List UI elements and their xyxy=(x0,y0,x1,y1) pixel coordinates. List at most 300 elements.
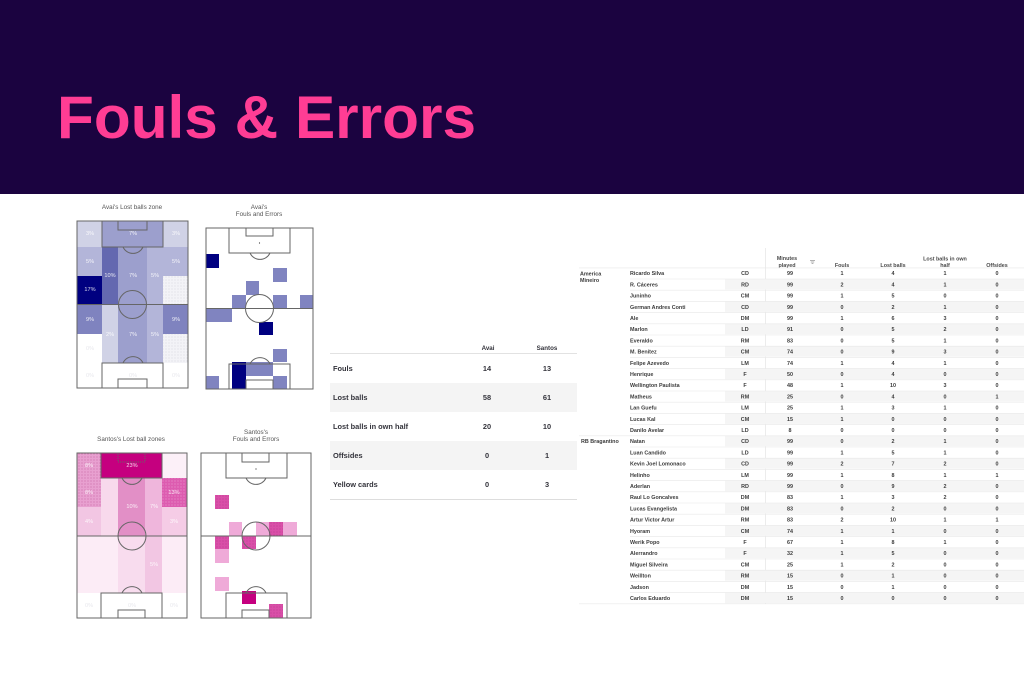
row: offsides: Offsides xyxy=(333,451,363,460)
panel: Avai lost balls zone heatmap: 9% xyxy=(172,317,180,323)
row: Weillton: RM xyxy=(741,574,750,580)
row: Wellington Paulista: 1 xyxy=(840,383,844,389)
row: lost balls: Lost balls xyxy=(333,393,368,402)
row: German Andres Conti: German Andres Conti xyxy=(630,305,686,311)
row: Natan: 2 xyxy=(892,439,894,445)
row: Aderlan: 99 xyxy=(787,484,793,490)
row: Wellington Paulista: 0 xyxy=(996,383,998,389)
row: Hyoram xyxy=(630,529,998,535)
row: yellow cards: 0 xyxy=(485,480,489,489)
row: Marlon: Marlon xyxy=(630,327,648,333)
table column headers: Minutes xyxy=(777,256,797,262)
panel: Santos lost ball zones heatmap: 0% xyxy=(170,603,178,609)
row: offsides xyxy=(333,451,549,460)
row: Ricardo Silva: CD xyxy=(741,271,749,277)
row: Jadson: 15 xyxy=(787,585,793,591)
row: Jadson xyxy=(630,585,998,591)
row: Aderlan: Aderlan xyxy=(630,484,650,490)
row: Lucas Kal: 0 xyxy=(944,417,946,423)
row: Luan Candido xyxy=(630,450,998,456)
panel: Santos lost ball zones heatmap xyxy=(77,436,187,618)
row: Lucas Kal: Lucas Kal xyxy=(630,417,656,423)
table column headers: Offsides xyxy=(986,263,1008,269)
row: Juninho: 5 xyxy=(892,294,894,300)
panel: Santos lost ball zones heatmap: 8% xyxy=(85,490,93,496)
row: Carlos Eduardo xyxy=(630,596,998,602)
row: Kevin Joel Lomonaco: CD xyxy=(741,462,749,468)
row: Henrique: 0 xyxy=(944,372,946,378)
row: Raul Lo Goncalves: DM xyxy=(741,495,750,501)
team label: America Mineiro: America xyxy=(580,272,602,278)
row: Lucas Kal: 15 xyxy=(787,417,793,423)
panel: Avai lost balls zone heatmap: 17% xyxy=(84,287,96,293)
row: Lucas Evangelista: 0 xyxy=(840,506,844,512)
row: Miguel Silveira: CM xyxy=(741,562,750,568)
panel: Avai lost balls zone heatmap: 3% xyxy=(86,231,94,237)
row: Juninho: 0 xyxy=(944,294,946,300)
panel: Avai lost balls zone heatmap: 0% xyxy=(86,373,94,379)
row: Raul Lo Goncalves: 83 xyxy=(787,495,793,501)
row: Werik Popo: 1 xyxy=(944,540,946,546)
row: Wellington Paulista: F xyxy=(743,383,747,389)
row: Carlos Eduardo: 0 xyxy=(944,596,946,602)
row: Marlon: 0 xyxy=(996,327,998,333)
row: Luan Candido: 1 xyxy=(840,450,844,456)
row: Wellington Paulista xyxy=(630,383,998,389)
panel: Avai lost balls zone heatmap: 9% xyxy=(86,317,94,323)
row: Luan Candido: LD xyxy=(741,450,749,456)
panel: Avai lost balls zone heatmap: 5% xyxy=(151,273,159,279)
row: Lucas Kal: 0 xyxy=(996,417,998,423)
row: Jadson: 0 xyxy=(996,585,998,591)
row: Everaldo: 5 xyxy=(892,338,894,344)
row: Hyoram: 1 xyxy=(892,529,894,535)
row: Lan Guefu xyxy=(630,406,998,412)
row: Artur Victor Artur: 2 xyxy=(840,518,844,524)
row: Raul Lo Goncalves: 3 xyxy=(892,495,894,501)
row: Lan Guefu: 25 xyxy=(787,406,793,412)
heading: Avai lost balls zone: Avai's Lost balls zone xyxy=(102,204,163,211)
row: lost balls in own half: 20 xyxy=(483,422,491,431)
row: Felipe Azevedo: LM xyxy=(741,361,749,367)
row: Felipe Azevedo: 4 xyxy=(892,361,894,367)
row: Marlon: 5 xyxy=(892,327,894,333)
row: Juninho: Juninho xyxy=(630,294,652,300)
row: Kevin Joel Lomonaco: Kevin Joel Lomonaco xyxy=(630,462,686,468)
row: lost balls in own half: Lost balls in own half xyxy=(333,422,409,431)
row: Artur Victor Artur: 1 xyxy=(944,518,946,524)
row: Helinho: 1 xyxy=(996,473,998,479)
row: Hyoram: CM xyxy=(741,529,750,535)
table column headers: Fouls xyxy=(835,263,849,269)
row: Matheus: 0 xyxy=(840,394,844,400)
row: Aderlan: RD xyxy=(741,484,749,490)
row: Helinho xyxy=(630,473,998,479)
row: Artur Victor Artur: Artur Victor Artur xyxy=(630,518,675,524)
row: Werik Popo xyxy=(630,540,998,546)
title: Fouls & Errors xyxy=(57,84,476,151)
row: Lucas Evangelista: 83 xyxy=(787,506,793,512)
row: Carlos Eduardo: 0 xyxy=(996,596,998,602)
row: R. Caceres: 0 xyxy=(996,282,998,288)
row: Artur Victor Artur: 10 xyxy=(890,518,896,524)
row: Lucas Kal xyxy=(630,417,998,423)
row: Ale xyxy=(630,316,998,322)
row: German Andres Conti: 1 xyxy=(944,305,946,311)
row: Helinho: Helinho xyxy=(630,473,650,479)
panel: Santos lost ball zones heatmap: 3% xyxy=(170,519,178,525)
row: Ale: 1 xyxy=(840,316,844,322)
row: yellow cards: 3 xyxy=(545,480,549,489)
row: Aderlan: 0 xyxy=(996,484,998,490)
row: Natan: 0 xyxy=(996,439,998,445)
row: Raul Lo Goncalves: 1 xyxy=(840,495,844,501)
row: Hyoram: Hyoram xyxy=(630,529,650,535)
heading: Santos fouls and errors: Santos's xyxy=(244,429,268,436)
row: Matheus: Matheus xyxy=(630,394,652,400)
row: Marlon: 2 xyxy=(944,327,946,333)
heading: Avai fouls and errors: Fouls and Errors xyxy=(236,211,282,218)
row: Ale: 3 xyxy=(944,316,946,322)
row: Henrique xyxy=(630,372,998,378)
row: Carlos Eduardo: 0 xyxy=(892,596,894,602)
row: offsides: 1 xyxy=(545,451,549,460)
panel: team comparison table xyxy=(330,345,577,500)
row: Miguel Silveira: 25 xyxy=(787,562,793,568)
row: Everaldo: 0 xyxy=(996,338,998,344)
row: Artur Victor Artur: RM xyxy=(741,518,750,524)
row: lost balls in own half xyxy=(333,422,551,431)
row: M. Benitez: M. Benítez xyxy=(630,350,657,356)
row: Alerrandro: 5 xyxy=(892,551,894,557)
row: Weillton xyxy=(630,574,998,580)
team label: America Mineiro: Mineiro xyxy=(580,278,600,284)
panel: Avai lost balls zone heatmap: 3% xyxy=(172,231,180,237)
row: Lan Guefu: 1 xyxy=(840,406,844,412)
row: Helinho: 1 xyxy=(840,473,844,479)
row: Marlon: 91 xyxy=(787,327,793,333)
row: lost balls: 58 xyxy=(483,393,491,402)
row: Aderlan: 9 xyxy=(892,484,894,490)
table header xyxy=(482,345,558,352)
row: Ricardo Silva: 4 xyxy=(892,271,894,277)
row: Ricardo Silva: 99 xyxy=(787,271,793,277)
row: Lan Guefu: LM xyxy=(741,406,749,412)
row: Everaldo: RM xyxy=(741,338,750,344)
table column headers: half xyxy=(940,263,950,269)
row: Matheus: 25 xyxy=(787,394,793,400)
row: R. Caceres xyxy=(630,282,998,288)
panel: Santos lost ball zones heatmap: 0% xyxy=(85,603,93,609)
row: Natan: CD xyxy=(741,439,749,445)
row: M. Benitez: 0 xyxy=(996,350,998,356)
panel: Santos lost ball zones heatmap: 4% xyxy=(85,519,93,525)
row: Wellington Paulista: Wellington Paulista xyxy=(630,383,681,389)
row: Ricardo Silva: 1 xyxy=(840,271,844,277)
row: German Andres Conti: 0 xyxy=(996,305,998,311)
row: Lan Guefu: 0 xyxy=(996,406,998,412)
row: Henrique: 50 xyxy=(787,372,793,378)
row: Alerrandro xyxy=(630,551,998,557)
row: Danilo Avelar: LD xyxy=(741,428,749,434)
row: Helinho: 8 xyxy=(892,473,894,479)
panel: Santos lost ball zones heatmap: 8% xyxy=(85,463,93,469)
row: Jadson: Jadson xyxy=(630,585,649,591)
row: Raul Lo Goncalves: 2 xyxy=(944,495,946,501)
row: yellow cards xyxy=(333,480,549,489)
panel: Santos lost ball zones heatmap: 5% xyxy=(150,562,158,568)
panel: Santos lost ball zones heatmap: 13% xyxy=(168,490,180,496)
row: fouls xyxy=(333,364,551,373)
row: Henrique: Henrique xyxy=(630,372,653,378)
row: Lucas Evangelista: 0 xyxy=(944,506,946,512)
row: Natan xyxy=(630,439,998,445)
row: German Andres Conti: 99 xyxy=(787,305,793,311)
row: German Andres Conti xyxy=(630,305,998,311)
row: Ricardo Silva: 0 xyxy=(996,271,998,277)
row: German Andres Conti: CD xyxy=(741,305,749,311)
row: Weillton: 0 xyxy=(996,574,998,580)
row: Natan: Natan xyxy=(630,439,645,445)
row: Wellington Paulista: 48 xyxy=(787,383,793,389)
row: R. Caceres: R. Cáceres xyxy=(630,282,658,288)
row: Lucas Evangelista: DM xyxy=(741,506,750,512)
row: Lan Guefu: 1 xyxy=(944,406,946,412)
row: Luan Candido: Luan Candido xyxy=(630,450,667,456)
row: M. Benitez: CM xyxy=(741,350,750,356)
row: Werik Popo: F xyxy=(743,540,747,546)
heading: Santos fouls and errors: Fouls and Errors xyxy=(233,436,279,443)
row: Matheus: 0 xyxy=(944,394,946,400)
panel: Avai lost balls zone heatmap: 7% xyxy=(129,273,137,279)
table column headers: Lost balls in own xyxy=(923,256,967,262)
row: Ale: DM xyxy=(741,316,750,322)
row: Raul Lo Goncalves xyxy=(630,495,998,501)
row: Lucas Kal: CM xyxy=(741,417,750,423)
row: R. Caceres: RD xyxy=(741,282,749,288)
row: Felipe Azevedo xyxy=(630,361,998,367)
row: Werik Popo: Werik Popo xyxy=(630,540,660,546)
panel: Santos lost ball zones heatmap: 7% xyxy=(150,504,158,510)
row: Jadson: 1 xyxy=(892,585,894,591)
row: Felipe Azevedo: 1 xyxy=(840,361,844,367)
panel: Santos lost ball zones heatmap: 23% xyxy=(126,463,138,469)
row: Lucas Evangelista: 2 xyxy=(892,506,894,512)
row: Raul Lo Goncalves: Raul Lo Goncalves xyxy=(630,495,679,501)
row: Jadson: 0 xyxy=(840,585,844,591)
row: Kevin Joel Lomonaco xyxy=(630,462,998,468)
panel: Avai lost balls zone heatmap xyxy=(77,204,188,388)
row: Miguel Silveira: Miguel Silveira xyxy=(630,562,669,568)
row: M. Benitez: 0 xyxy=(840,350,844,356)
row: Henrique: 0 xyxy=(996,372,998,378)
row: fouls: 13 xyxy=(543,364,551,373)
row: Ale: 99 xyxy=(787,316,793,322)
row: Alerrandro: 1 xyxy=(840,551,844,557)
row: Lan Guefu: 3 xyxy=(892,406,894,412)
row: lost balls xyxy=(333,393,551,402)
row: Raul Lo Goncalves: 0 xyxy=(996,495,998,501)
row: R. Caceres: 2 xyxy=(840,282,844,288)
row: Ale: 6 xyxy=(892,316,894,322)
row: Werik Popo: 8 xyxy=(892,540,894,546)
row: Luan Candido: 5 xyxy=(892,450,894,456)
row: Danilo Avelar: Danilo Avelar xyxy=(630,428,665,434)
heading: Santos lost ball zones: Santos's Lost ball zones xyxy=(97,436,165,443)
panel: Santos fouls and errors map xyxy=(201,429,311,618)
row: Juninho: CM xyxy=(741,294,750,300)
row: Everaldo: 1 xyxy=(944,338,946,344)
row: Aderlan xyxy=(630,484,998,490)
panel: Santos lost ball zones heatmap: 10% xyxy=(126,504,138,510)
row: Aderlan: 2 xyxy=(944,484,946,490)
table column headers: Lost balls xyxy=(880,263,906,269)
panel: player statistics table xyxy=(579,248,1024,604)
row: Kevin Joel Lomonaco: 2 xyxy=(840,462,844,468)
row: Aderlan: 0 xyxy=(840,484,844,490)
panel: Avai lost balls zone heatmap: 0% xyxy=(129,373,137,379)
row: Carlos Eduardo: 0 xyxy=(840,596,844,602)
row: Danilo Avelar xyxy=(630,428,998,434)
row: M. Benitez: 9 xyxy=(892,350,894,356)
row: fouls: 14 xyxy=(483,364,492,373)
panel: Avai lost balls zone heatmap: 7% xyxy=(129,231,137,237)
row: Juninho: 99 xyxy=(787,294,793,300)
row: Danilo Avelar: 0 xyxy=(944,428,946,434)
row: M. Benitez: 74 xyxy=(787,350,793,356)
row: Carlos Eduardo: Carlos Eduardo xyxy=(630,596,671,602)
row: Werik Popo: 1 xyxy=(840,540,844,546)
table header: Santos xyxy=(537,345,558,352)
row: Wellington Paulista: 10 xyxy=(890,383,896,389)
row: Felipe Azevedo: 1 xyxy=(944,361,946,367)
row: Danilo Avelar: 0 xyxy=(840,428,844,434)
row: Juninho: 1 xyxy=(840,294,844,300)
row: Werik Popo: 67 xyxy=(787,540,793,546)
table column headers xyxy=(777,256,1008,269)
row: R. Caceres: 99 xyxy=(787,282,793,288)
row: Carlos Eduardo: 15 xyxy=(787,596,793,602)
row: Everaldo: Everaldo xyxy=(630,338,653,344)
row: Natan: 1 xyxy=(944,439,946,445)
panel: Avai lost balls zone heatmap: 2% xyxy=(106,332,114,338)
row: Felipe Azevedo: Felipe Azevedo xyxy=(630,361,670,367)
row: Natan: 99 xyxy=(787,439,793,445)
row: Ale: 0 xyxy=(996,316,998,322)
row: German Andres Conti: 2 xyxy=(892,305,894,311)
row: Matheus: 4 xyxy=(892,394,894,400)
row: Danilo Avelar: 0 xyxy=(892,428,894,434)
row: Weillton: 0 xyxy=(944,574,946,580)
row: Artur Victor Artur: 1 xyxy=(996,518,998,524)
row: R. Caceres: 4 xyxy=(892,282,894,288)
row: lost balls in own half: 10 xyxy=(543,422,551,431)
row: Alerrandro: Alerrandro xyxy=(630,551,658,557)
row: Kevin Joel Lomonaco: 99 xyxy=(787,462,793,468)
team label: RB Bragantino: RB Bragantino xyxy=(581,439,619,445)
row: Miguel Silveira: 0 xyxy=(944,562,946,568)
row: Felipe Azevedo: 0 xyxy=(996,361,998,367)
row: lost balls: 61 xyxy=(543,393,551,402)
row: Henrique: 0 xyxy=(840,372,844,378)
row: Natan: 0 xyxy=(840,439,844,445)
row: Kevin Joel Lomonaco: 2 xyxy=(944,462,946,468)
row: Lucas Evangelista xyxy=(630,506,998,512)
row: Lan Guefu: Lan Guefu xyxy=(630,406,657,412)
row: fouls: Fouls xyxy=(333,364,353,373)
row: Kevin Joel Lomonaco: 0 xyxy=(996,462,998,468)
row: Helinho: 99 xyxy=(787,473,793,479)
row: Kevin Joel Lomonaco: 7 xyxy=(892,462,894,468)
row: Marlon xyxy=(630,327,998,333)
row: Henrique: F xyxy=(743,372,747,378)
row: Matheus xyxy=(630,394,998,400)
row: Everaldo xyxy=(630,338,998,344)
row: Weillton: Weillton xyxy=(630,574,651,580)
row: Juninho xyxy=(630,294,998,300)
row: Miguel Silveira: 2 xyxy=(892,562,894,568)
row: Felipe Azevedo: 74 xyxy=(787,361,793,367)
panel: Avai lost balls zone heatmap: 5% xyxy=(172,259,180,265)
row: Ricardo Silva: 1 xyxy=(944,271,946,277)
row: Helinho: 1 xyxy=(944,473,946,479)
row: Jadson: 0 xyxy=(944,585,946,591)
row: Juninho: 0 xyxy=(996,294,998,300)
panel: Avai lost balls zone heatmap: 5% xyxy=(151,332,159,338)
panel: Santos lost ball zones heatmap: 0% xyxy=(128,603,136,609)
panel: Avai lost balls zone heatmap: 5% xyxy=(86,259,94,265)
row: Wellington Paulista: 3 xyxy=(944,383,946,389)
panel: Avai lost balls zone heatmap: 10% xyxy=(104,273,116,279)
row: Werik Popo: 0 xyxy=(996,540,998,546)
row: Artur Victor Artur: 83 xyxy=(787,518,793,524)
row: Danilo Avelar: 8 xyxy=(788,428,792,434)
row: Miguel Silveira: 0 xyxy=(996,562,998,568)
row: Lucas Kal: 0 xyxy=(892,417,894,423)
row: Weillton: 0 xyxy=(840,574,844,580)
row: Hyoram: 0 xyxy=(944,529,946,535)
row: Luan Candido: 0 xyxy=(996,450,998,456)
row: Ale: Ale xyxy=(630,316,638,322)
row: Jadson: DM xyxy=(741,585,750,591)
row: Alerrandro: 0 xyxy=(944,551,946,557)
row: yellow cards: Yellow cards xyxy=(333,480,378,489)
table column headers: played xyxy=(778,263,796,269)
header banner xyxy=(0,0,1024,194)
row: Alerrandro: 0 xyxy=(996,551,998,557)
row: Henrique: 4 xyxy=(892,372,894,378)
row: Matheus: RM xyxy=(741,394,750,400)
panel: Avai lost balls zone heatmap: 7% xyxy=(129,332,137,338)
row: Artur Victor Artur xyxy=(630,518,998,524)
row: Ricardo Silva xyxy=(630,271,998,277)
row: Lucas Evangelista: Lucas Evangelista xyxy=(630,506,678,512)
row: Miguel Silveira: 1 xyxy=(840,562,844,568)
row: German Andres Conti: 0 xyxy=(840,305,844,311)
row: Matheus: 1 xyxy=(996,394,998,400)
row: Marlon: 0 xyxy=(840,327,844,333)
panel: Avai fouls and errors map xyxy=(206,204,313,389)
row: Lucas Evangelista: 0 xyxy=(996,506,998,512)
row: Weillton: 15 xyxy=(787,574,793,580)
row: Luan Candido: 99 xyxy=(787,450,793,456)
table header: Avai xyxy=(482,345,495,352)
row: M. Benitez xyxy=(630,350,998,356)
row: Luan Candido: 1 xyxy=(944,450,946,456)
heading: Avai fouls and errors: Avai's xyxy=(251,204,267,211)
row: Everaldo: 0 xyxy=(840,338,844,344)
row: M. Benitez: 3 xyxy=(944,350,946,356)
